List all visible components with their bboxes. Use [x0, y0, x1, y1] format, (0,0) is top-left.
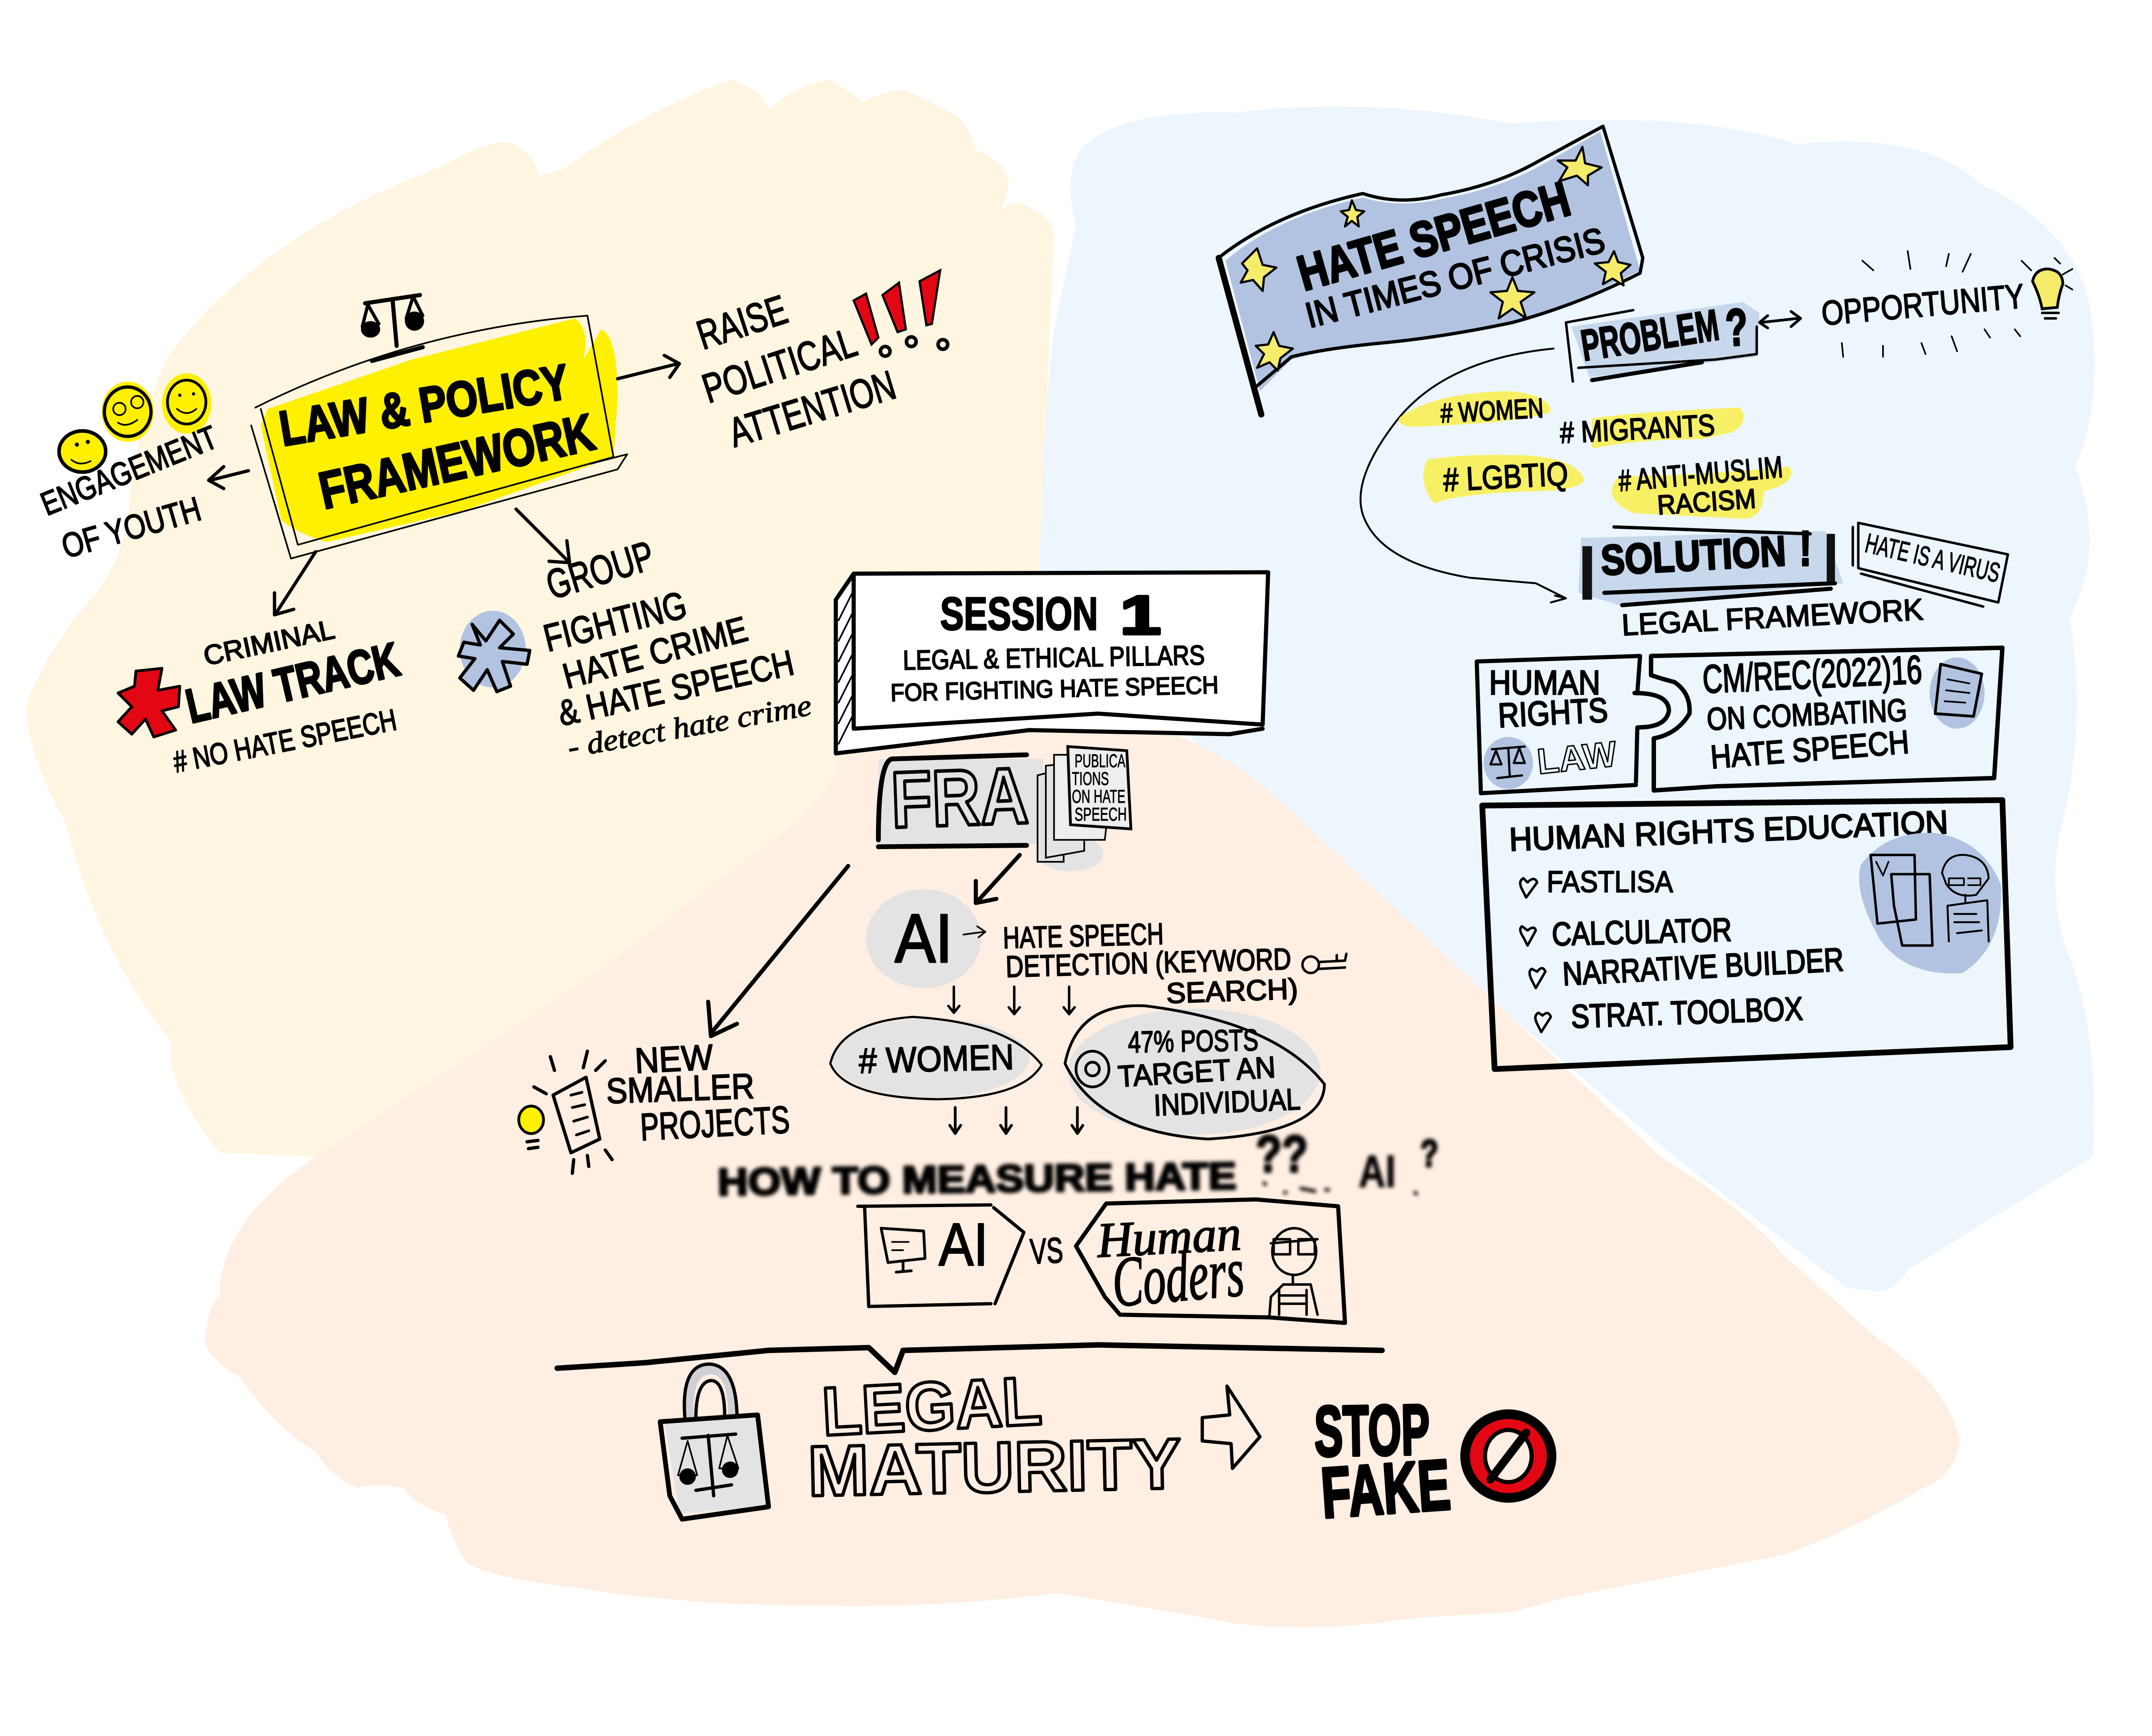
card: human rights law: RIGHTS: [1497, 691, 1609, 735]
text: criminal law track: LAW TRACK: [181, 632, 404, 733]
publications stack: TIONS: [1072, 768, 1109, 789]
arrow: to new smaller projects: [708, 866, 848, 1036]
icon: key: [1302, 954, 1347, 973]
arrows: three down lower: [950, 1107, 1083, 1134]
icon: person: [1269, 1228, 1318, 1315]
text: new smaller projects: SMALLER: [606, 1066, 755, 1111]
bubble: women: [830, 1017, 1041, 1099]
comparison: AI box: AI: [939, 1211, 988, 1278]
heading: law and policy framework: [275, 354, 600, 520]
publications stack: PUBLICA: [1074, 750, 1126, 771]
AI blob: [866, 889, 981, 988]
card: CM/REC 2022 16 with puzzle tab: ON COMBATING: [1706, 693, 1908, 737]
text: criminal law track: [171, 614, 404, 779]
hashtag: women: [1399, 391, 1551, 429]
session box: SESSION: [940, 588, 1098, 640]
card: CM/REC 2022 16 with puzzle tab: HATE SPEECH: [1709, 723, 1910, 776]
comparison: human coders box: [1076, 1199, 1345, 1323]
card: CM/REC 2022 16 with puzzle tab: [1635, 647, 2002, 790]
session box: FOR FIGHTING HATE SPEECH: [890, 671, 1219, 707]
icon: scales on framework: [361, 295, 424, 361]
heading: how to measure hate (blurred): ??: [1256, 1125, 1308, 1183]
text: engagement of youth: [36, 419, 222, 566]
heading: legal maturity: LEGAL: [820, 1362, 1044, 1450]
bubble: women: # WOMEN: [858, 1037, 1014, 1081]
text: hate speech detection: SEARCH): [1166, 972, 1298, 1009]
session box: [836, 572, 1268, 753]
list: education tools: NARRATIVE BUILDER: [1562, 941, 1845, 992]
hashtag: lgbtiq: # LGBTIQ: [1442, 455, 1569, 498]
arrow: AI to detection: [964, 926, 985, 937]
text: group fighting hate crime: [539, 532, 814, 764]
problem box: PROBLEM: [1578, 300, 1722, 370]
flag: HATE SPEECH: [1292, 171, 1576, 301]
card: human rights law: [1477, 656, 1640, 793]
icon: blue asterisk: [459, 611, 530, 691]
session box: LEGAL & ETHICAL PILLARS: [903, 640, 1205, 676]
arrow: outline to stop fake: [1202, 1386, 1260, 1468]
arrows: three down: [948, 987, 1074, 1014]
FRA box: FRA: [890, 751, 1030, 845]
list: education tools: CALCULATOR: [1551, 911, 1732, 953]
arrow: to law track: [274, 552, 316, 615]
icon: youth faces: [59, 373, 212, 472]
bubble: 47 percent posts: TARGET AN: [1117, 1051, 1277, 1094]
text: new smaller projects: PROJECTS: [639, 1098, 791, 1149]
text: raise political attention: RAISE: [691, 286, 793, 358]
text: hate speech detection: DETECTION (KEYWORD: [1005, 943, 1292, 984]
icon: scales in blue circle: [1484, 737, 1533, 789]
solution box: SOLUTION: [1600, 528, 1787, 584]
heading: law and policy framework: LAW & POLICY: [275, 354, 573, 456]
icon: target: [1076, 1051, 1109, 1087]
text: stop fake: [1314, 1390, 1453, 1533]
illustration: screens and person: [1859, 833, 2001, 973]
icon: red asterisk: [118, 668, 180, 737]
text: group fighting hate crime: HATE CRIME: [558, 609, 752, 696]
icon: phone with bulb: [519, 1051, 612, 1173]
comparison: AI box: [858, 1205, 1024, 1306]
comparison: human coders box: Coders: [1109, 1232, 1247, 1322]
arrow: problem to opportunity: [1759, 312, 1801, 328]
text: group fighting hate crime: & HATE SPEECH: [554, 642, 797, 733]
heading: law and policy framework: FRAMEWORK: [314, 402, 600, 520]
text: new smaller projects: NEW: [634, 1037, 714, 1081]
background: blue region: [1039, 106, 2095, 1291]
bracket line: [557, 1345, 1382, 1372]
card: human rights law: HUMAN: [1489, 664, 1600, 702]
icon: light bulb with rays: [1842, 251, 2072, 357]
panel: hate speech in times of crisis: [1219, 126, 2072, 1069]
problem box: ?: [1724, 297, 1749, 357]
card: CM/REC 2022 16 with puzzle tab: CM/REC(2022)16: [1701, 647, 1923, 701]
arrow: FRA to AI: [976, 855, 1020, 903]
panel: law and policy framework: [36, 270, 948, 779]
card: human rights law: LAW: [1535, 733, 1619, 781]
AI blob: AI: [895, 900, 952, 977]
card: human rights education: [1482, 800, 2010, 1069]
bubble: 47 percent posts: 47% POSTS: [1128, 1024, 1259, 1059]
hashtag: anti-muslim racism: # ANTI-MUSLIM: [1617, 450, 1784, 498]
heading: legal maturity: [807, 1362, 1182, 1511]
publications stack: ON HATE: [1072, 786, 1125, 807]
heading: how to measure hate (blurred): AI: [1359, 1146, 1396, 1197]
text: engagement of youth: ENGAGEMENT: [36, 419, 222, 523]
arrow: to group: [516, 509, 570, 563]
text: group fighting hate crime: GROUP: [541, 532, 659, 608]
note: hate is a virus: [1853, 523, 2008, 606]
hashtag: migrants: # MIGRANTS: [1559, 408, 1716, 450]
framework frame: [251, 316, 627, 558]
text: raise political attention: ATTENTION: [723, 362, 901, 456]
text: group fighting hate crime: FIGHTING: [539, 583, 691, 660]
bubble: 47 percent posts: INDIVIDUAL: [1153, 1083, 1301, 1122]
text: engagement of youth: OF YOUTH: [57, 490, 205, 566]
heading: how to measure hate (blurred): ?: [1420, 1132, 1438, 1175]
note: hate is a virus: HATE IS A VIRUS: [1863, 528, 2003, 589]
heading: how to measure hate (blurred): [717, 1125, 1438, 1204]
publications stack: [1037, 747, 1131, 871]
text: hate speech detection: HATE SPEECH: [1003, 917, 1164, 955]
text: criminal law track: # NO HATE SPEECH: [171, 703, 399, 779]
text: criminal law track: CRIMINAL: [201, 614, 338, 672]
publications stack: SPEECH: [1074, 804, 1127, 825]
icon: hearts: [1520, 878, 1551, 1032]
panel: session 1: [519, 572, 1556, 1533]
arrow: to youth: [209, 467, 248, 488]
text: raise political attention: POLITICAL: [697, 319, 862, 412]
text: vs: VS: [1029, 1230, 1064, 1272]
text: group fighting hate crime: - detect hate crime: [565, 688, 814, 764]
list: education tools: STRAT. TOOLBOX: [1570, 990, 1803, 1035]
hashtag: anti-muslim racism: RACISM: [1656, 483, 1757, 521]
text: legal framework: LEGAL FRAMEWORK: [1621, 593, 1924, 642]
text: opportunity: OPPORTUNITY: [1820, 277, 2026, 333]
flag: IN TIMES OF CRISIS: [1301, 220, 1609, 335]
heading: how to measure hate (blurred): HOW TO MEASURE HATE: [717, 1155, 1237, 1204]
solution box: [1578, 521, 1843, 605]
text: hate speech detection: [1003, 917, 1298, 1009]
text: stop fake: STOP: [1314, 1390, 1430, 1471]
icon: flag stars: [1241, 147, 1631, 370]
list: education tools: FASTLISA: [1547, 865, 1673, 898]
list: education tools: [1520, 865, 1845, 1035]
background: yellow region: [27, 80, 1054, 1157]
problem box: [1566, 297, 1759, 382]
icon: padlock scales: [660, 1364, 769, 1519]
icon: no sign: [1460, 1409, 1556, 1503]
text: stop fake: FAKE: [1318, 1444, 1453, 1533]
comparison: human coders box: Human: [1095, 1206, 1242, 1268]
session box: 1: [1120, 585, 1161, 646]
flag: [1219, 126, 1643, 415]
card: human rights education: HUMAN RIGHTS EDUCATION: [1509, 803, 1949, 858]
text: raise political attention: [691, 286, 901, 456]
bubble: 47 percent posts: [1065, 1006, 1324, 1139]
text: new smaller projects: [606, 1037, 791, 1149]
framework yellow sticky: [261, 318, 618, 542]
arrow: to raise attention: [618, 355, 679, 379]
icon: red exclamation marks: [854, 270, 948, 356]
heading: legal maturity: MATURITY: [807, 1423, 1182, 1511]
background: peach region: [205, 645, 1960, 1627]
hashtag: anti-muslim racism: [1612, 450, 1791, 521]
arrow: problem to solution curve: [1360, 349, 1566, 602]
hashtag: women: # WOMEN: [1440, 393, 1544, 429]
icon: document: [1930, 657, 1985, 729]
solution box: !: [1799, 521, 1812, 576]
